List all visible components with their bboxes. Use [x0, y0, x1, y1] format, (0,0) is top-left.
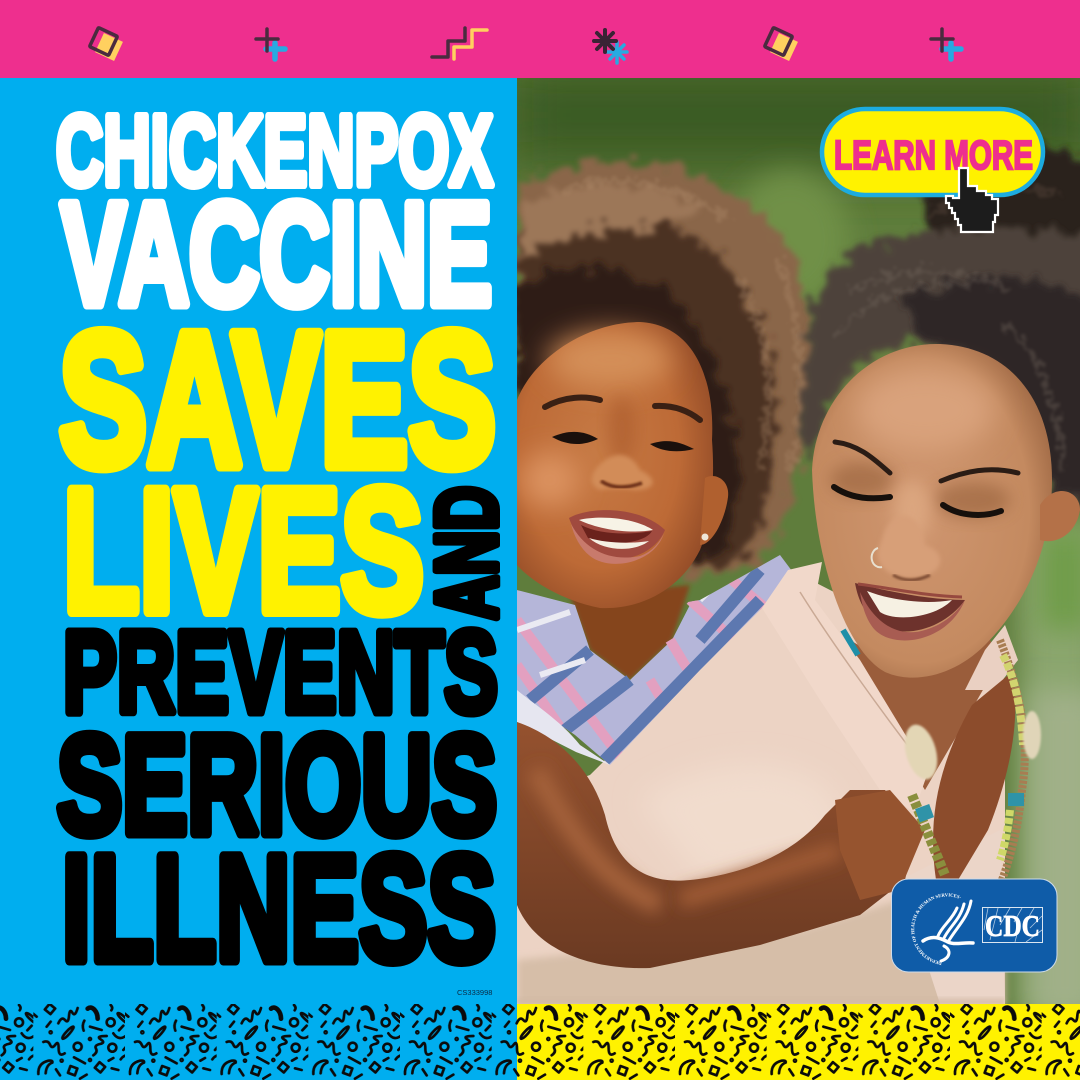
mother's collar	[762, 562, 926, 787]
icon: square 2	[765, 28, 798, 61]
background: blue left panel	[0, 78, 517, 1004]
mother's neck	[850, 640, 1000, 790]
heading: SAVES LIVES	[59, 294, 496, 649]
HHS seal text: DEPARTMENT OF HEALTH & HUMAN SERVICES·USA	[911, 893, 961, 966]
photo bottom shadow	[517, 997, 1007, 1004]
mother's top	[517, 572, 1005, 1004]
child shirt	[517, 550, 800, 770]
HHS eagle	[923, 901, 973, 961]
heading: CHICKENPOX VACCINE	[56, 95, 493, 335]
heading: PREVENTS SERIOUS ILLNESS	[57, 607, 498, 992]
heading: CHICKENPOX VACCINE: CHICKENPOX	[56, 95, 493, 207]
icon: hand cursor	[946, 168, 998, 232]
heading: PREVENTS SERIOUS ILLNESS: SERIOUS	[57, 706, 497, 863]
photo background foliage	[500, 60, 1080, 1020]
child hair	[517, 161, 812, 575]
CDC box: CDC	[985, 908, 1040, 943]
child's neck	[570, 585, 690, 680]
icon: asterisk	[594, 30, 627, 63]
icon row	[90, 28, 961, 63]
pattern band	[0, 1004, 1080, 1080]
icon: plus 2	[931, 29, 961, 59]
icon: stairs	[432, 28, 487, 59]
heading: SAVES LIVES: LIVES	[63, 454, 424, 649]
necklace beads	[843, 630, 1041, 885]
icon: plus 1	[256, 29, 285, 59]
heading: AND rotated: AND	[419, 486, 515, 620]
child's arm and hand	[517, 672, 1015, 968]
mother hair and bun	[800, 139, 1080, 505]
heading: CHICKENPOX VACCINE: VACCINE	[61, 173, 492, 335]
heading: SAVES LIVES: SAVES	[59, 294, 496, 506]
heading: PREVENTS SERIOUS ILLNESS: ILLNESS	[62, 824, 496, 992]
heading: PREVENTS SERIOUS ILLNESS: PREVENTS	[63, 607, 498, 737]
HHS seal text	[911, 893, 961, 966]
photo: child and mother	[500, 60, 1080, 1020]
icon: square 1	[90, 28, 123, 61]
child's face	[517, 322, 728, 608]
button: learn more	[822, 109, 1043, 195]
mother's face	[812, 344, 1080, 678]
top pink band	[0, 0, 1080, 78]
campaign code: CS333998	[457, 988, 492, 997]
